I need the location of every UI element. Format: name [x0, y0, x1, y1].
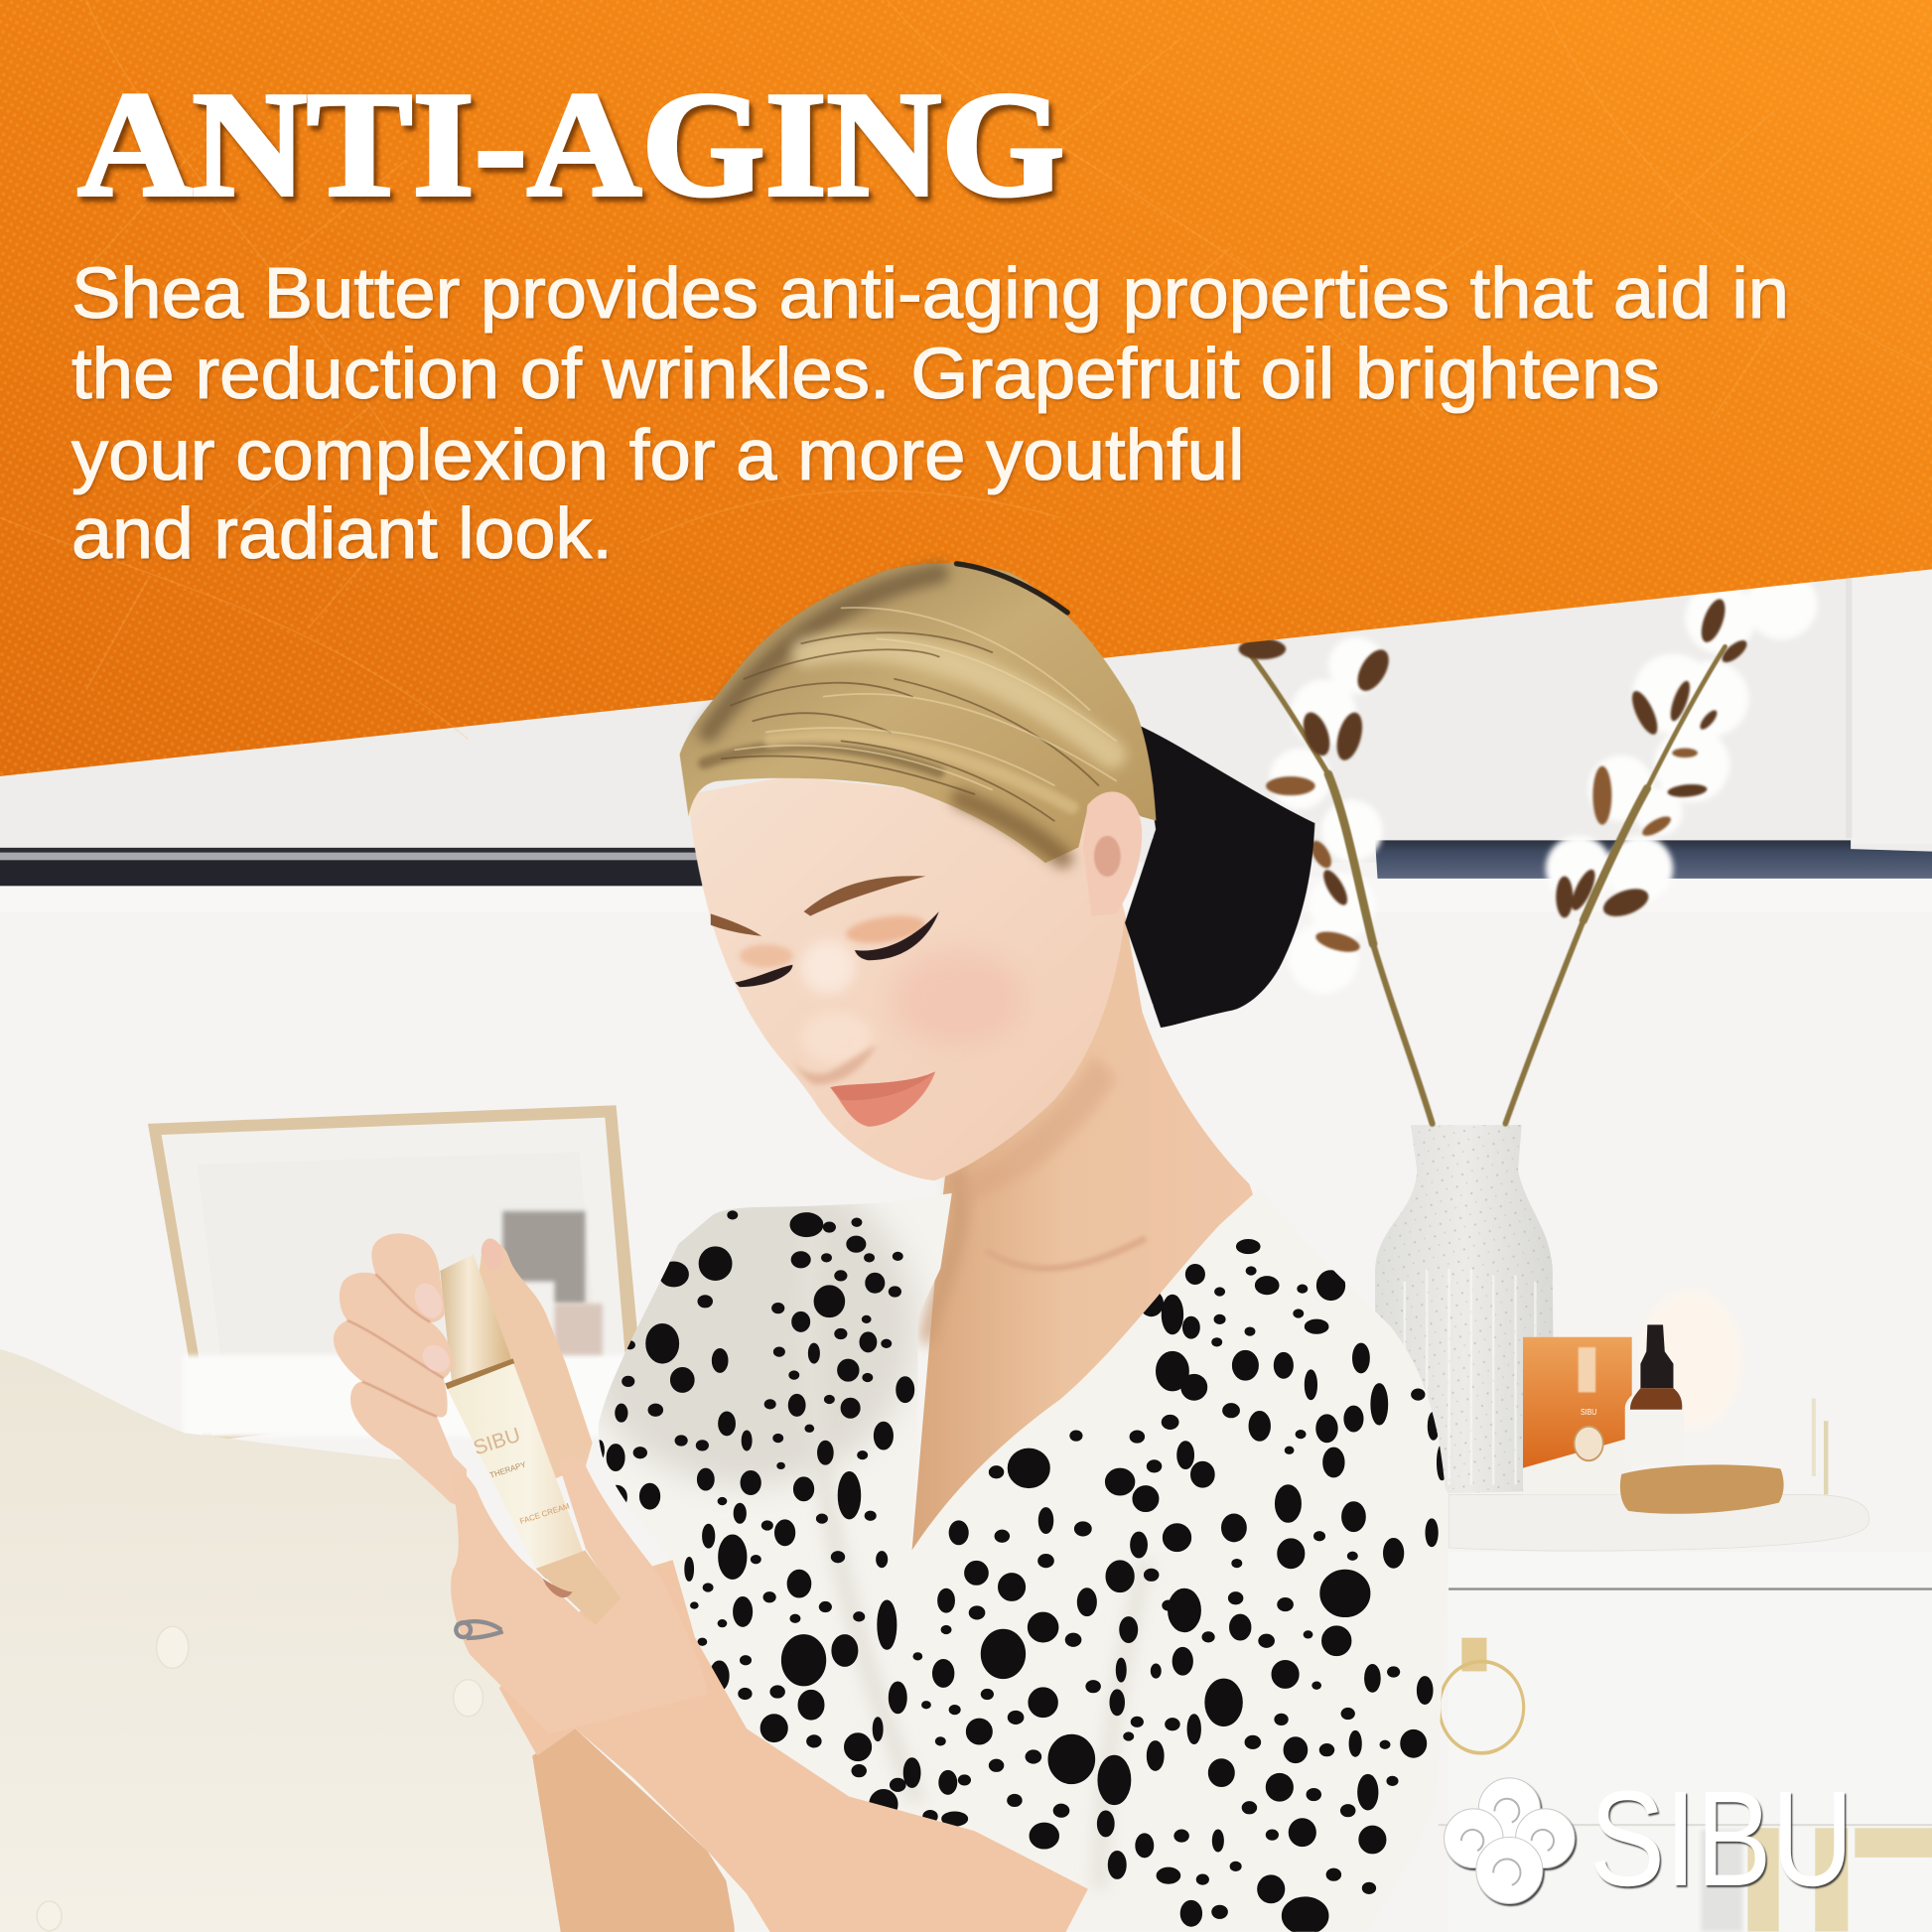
serum bottle: THERAPY: [488, 1459, 528, 1480]
orange soap box: SIBU: [1581, 1408, 1596, 1417]
candle: [1639, 1290, 1742, 1429]
body text: your complexion for a more youthful: [71, 416, 1244, 495]
orange banner: [0, 0, 1932, 776]
blonde hair: [680, 563, 1156, 863]
face: [688, 776, 1125, 1180]
polka dot dress: [576, 1167, 1469, 1932]
cream tufted chair: [0, 1349, 592, 1932]
upper hand fingers: [334, 1233, 467, 1509]
SIBU logo: [1445, 1762, 1854, 1914]
wordmark: SIBU: [1589, 1762, 1854, 1914]
eyes: [855, 911, 939, 960]
silver ring: [456, 1621, 503, 1638]
neck and chest: [911, 914, 1259, 1553]
serum bottle: [440, 1254, 586, 1579]
lips: [830, 1071, 935, 1127]
back arm: [532, 1728, 735, 1932]
dresser, tray and products: [1439, 1290, 1932, 1931]
gold table legs: [1747, 1828, 1932, 1931]
heading: ANTI-AGING: [77, 61, 1064, 227]
body text: and radiant look.: [71, 494, 613, 574]
serum bottle: FACE CREAM: [519, 1501, 571, 1526]
picture frame with artwork: [148, 1105, 643, 1442]
dropper bottle: [1625, 1324, 1684, 1466]
forearm: [499, 1560, 1088, 1932]
lower hand: [451, 1456, 708, 1734]
gold handle: [1440, 1638, 1524, 1753]
logo swirl icon: [1445, 1778, 1575, 1903]
thumb and back of grip: [464, 1242, 593, 1489]
orange soap box: [1523, 1337, 1632, 1494]
woman's head: [680, 563, 1156, 1202]
ear: [1083, 791, 1142, 916]
jaw shadow: [957, 1055, 1116, 1202]
cotton branches: [1239, 569, 1817, 1124]
body text: the reduction of wrinkles. Grapefruit oil brightens: [71, 335, 1660, 414]
black hair bow: [1125, 726, 1314, 1028]
body text: [71, 254, 1789, 574]
hands holding serum bottle: [334, 1233, 708, 1734]
serum bottle: SIBU: [471, 1424, 523, 1459]
ceramic vase: [1375, 1125, 1555, 1493]
eyebrows: [804, 876, 925, 916]
body text: Shea Butter provides anti-aging properties that aid in: [71, 254, 1789, 334]
bar of soap: [1620, 1464, 1784, 1514]
